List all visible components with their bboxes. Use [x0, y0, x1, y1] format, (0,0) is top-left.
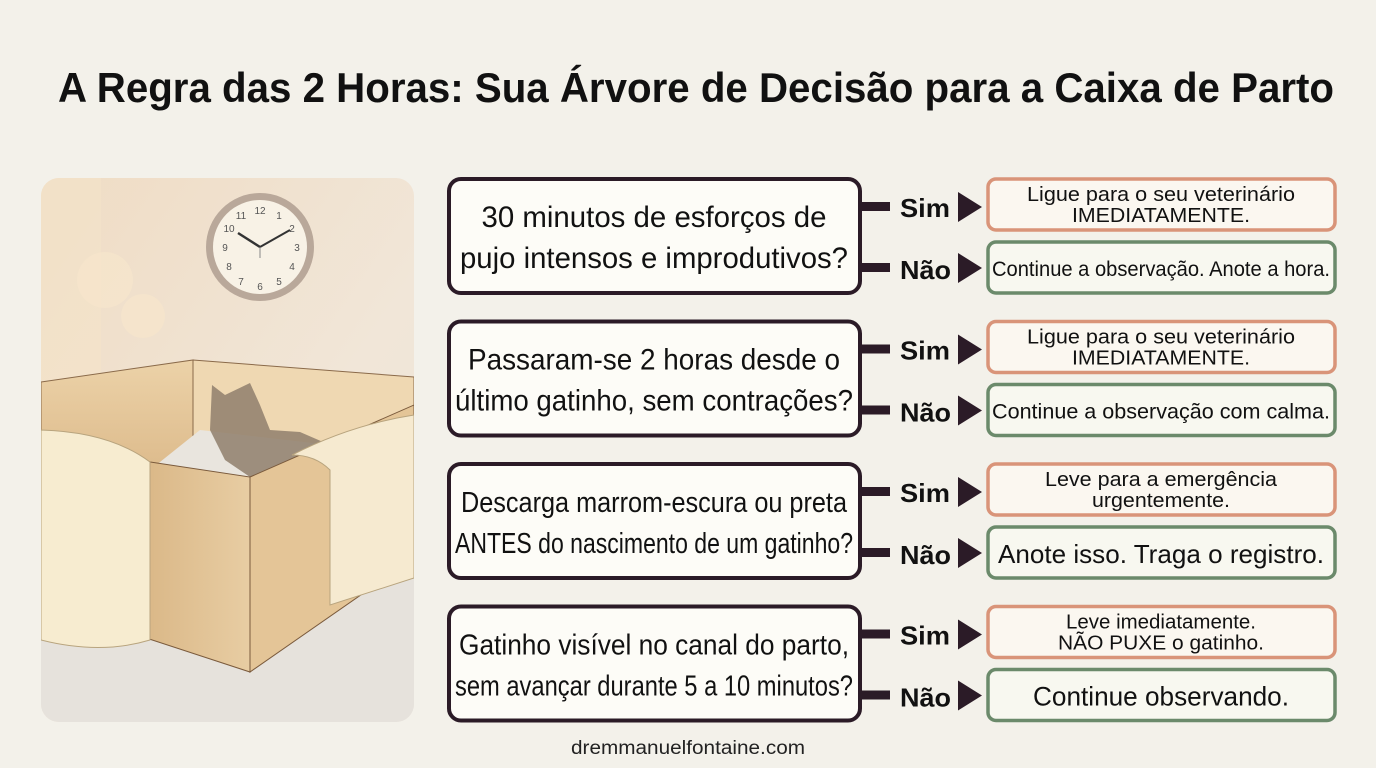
icon: wall clock: 12: [254, 206, 266, 217]
row 2: Sim: [900, 336, 950, 366]
icon: wall clock: 3: [294, 243, 300, 254]
row 2: Ligue para o seu veterinário: [1027, 326, 1295, 348]
row 2: IMEDIATAMENTE.: [1072, 348, 1250, 370]
icon: wall clock: 6: [257, 282, 263, 293]
icon: wall clock: 11: [236, 211, 247, 222]
row 2: [449, 322, 1335, 436]
row 3: urgentemente.: [1092, 490, 1230, 512]
row 4: Não: [900, 682, 951, 712]
icon: wall clock: 7: [238, 277, 244, 288]
icon: wall clock: 5: [276, 277, 282, 288]
row 4: NÃO PUXE o gatinho.: [1058, 630, 1264, 654]
icon: wall clock: 2: [289, 224, 295, 235]
row 1: Ligue para o seu veterinário: [1027, 184, 1295, 206]
box back walls: [41, 360, 193, 470]
icon: wall clock: 4: [289, 262, 295, 273]
row 3: Não: [900, 540, 951, 570]
row 4: sem avançar durante 5 a 10 minutos?: [455, 670, 853, 702]
icon: wall clock: 10: [223, 224, 235, 235]
row 3: Sim: [900, 478, 950, 508]
icon: wall clock: 8: [226, 262, 232, 273]
row 4: Leve imediatamente.: [1066, 612, 1256, 634]
row 2: Continue a observação com calma.: [992, 400, 1330, 424]
row 4: Sim: [900, 620, 950, 650]
row 1: Continue a observação. Anote a hora.: [992, 258, 1330, 281]
row 4: Gatinho visível no canal do parto,: [459, 630, 849, 662]
row 2: último gatinho, sem contrações?: [455, 384, 853, 418]
row 1: pujo intensos e improdutivos?: [460, 242, 848, 275]
row 4: Continue observando.: [1033, 682, 1289, 712]
row 3: [449, 464, 1335, 578]
icon: wall clock: 9: [222, 243, 228, 254]
illustration: birthing box with clock: [41, 178, 414, 722]
row 1: Não: [900, 255, 951, 285]
row 2: Não: [900, 398, 951, 428]
row 3: Leve para a emergência: [1045, 469, 1278, 491]
towels: [41, 430, 150, 648]
row 3: Descarga marrom-escura ou preta: [461, 487, 848, 519]
icon: wall clock: [206, 193, 314, 301]
icon: wall clock: 1: [276, 211, 282, 222]
title: A Regra das 2 Horas: Sua Árvore de Decisão para a Caixa de Parto: [58, 64, 1334, 111]
row 1: IMEDIATAMENTE.: [1072, 205, 1250, 227]
row 1: Sim: [900, 193, 950, 223]
row 3: ANTES do nascimento de um gatinho?: [455, 528, 853, 560]
front faces: [150, 461, 250, 673]
row 1: 30 minutos de esforços de: [482, 201, 826, 234]
decision rows: [449, 179, 1335, 720]
row 1: [449, 179, 1335, 293]
footer: dremmanuelfontaine.com: [571, 738, 805, 759]
row 2: Passaram-se 2 horas desde o: [468, 344, 840, 376]
row 3: Anote isso. Traga o registro.: [998, 539, 1324, 569]
cat silhouette: [210, 383, 330, 477]
row 4: [449, 606, 1335, 720]
